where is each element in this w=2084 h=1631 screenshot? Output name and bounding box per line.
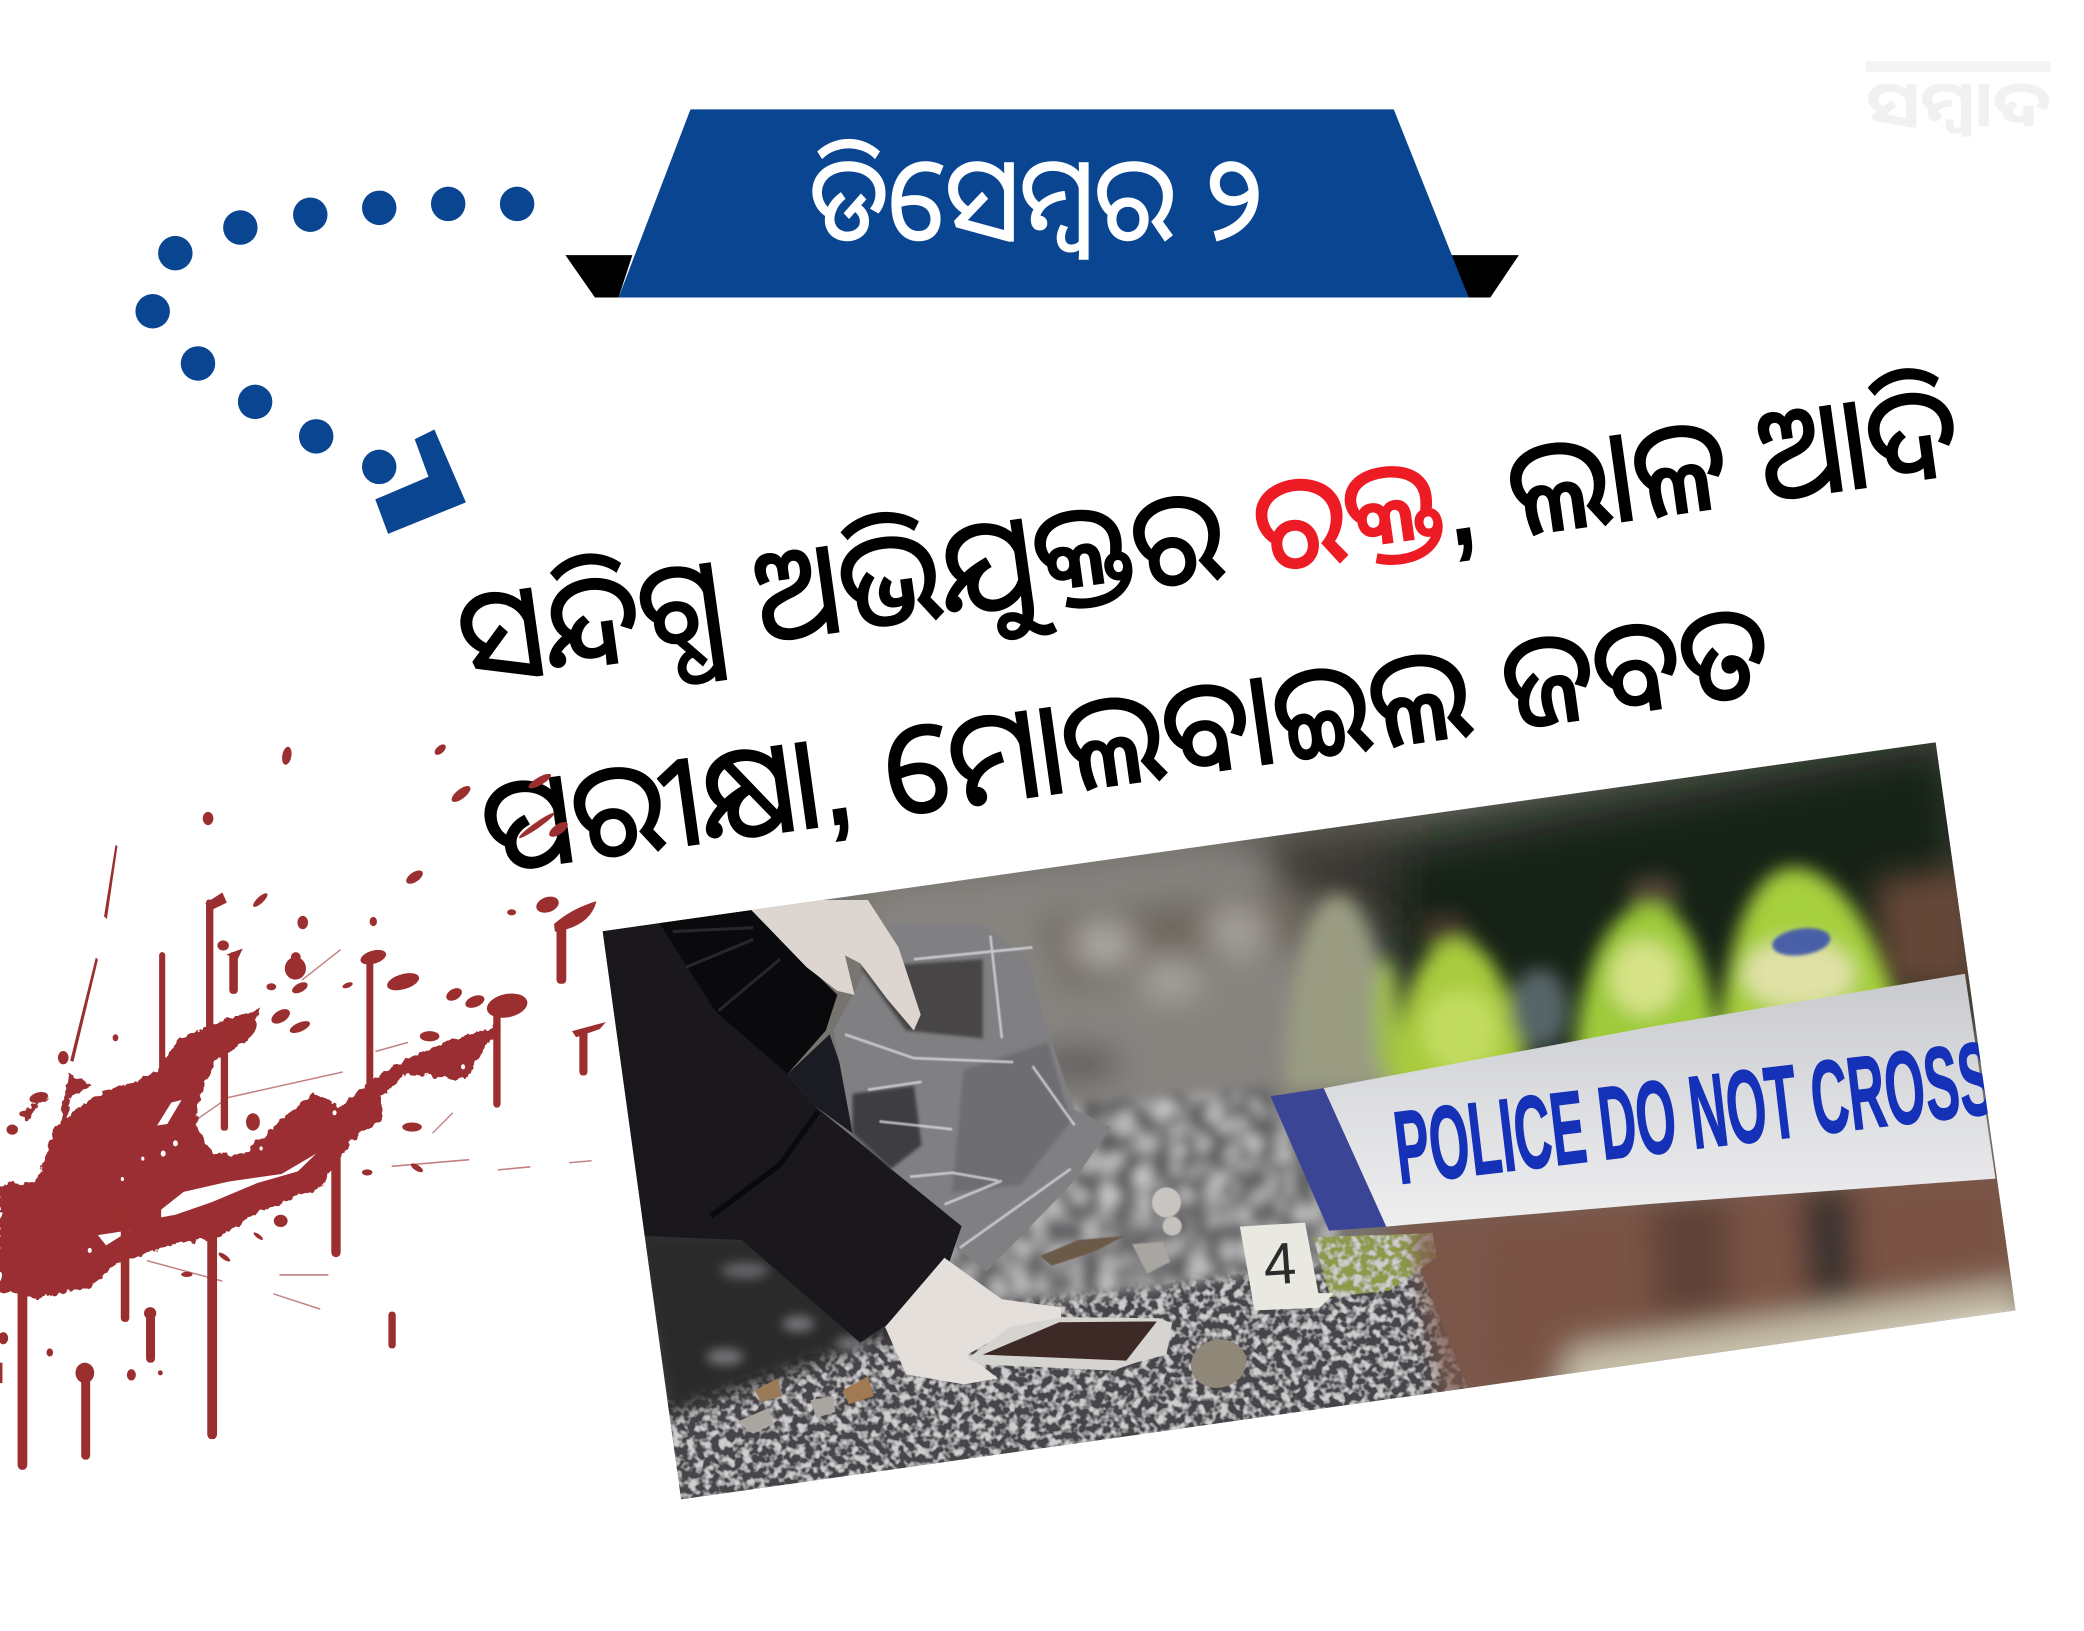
crime scene photo	[585, 718, 2035, 1517]
blurred hi-vis jackets	[1284, 867, 1905, 1091]
watermark: Sambad logo: ସମ୍ବାଦ	[1866, 68, 2051, 140]
gravel ground, blurred far section	[851, 1088, 1344, 1310]
date banner	[565, 109, 1519, 297]
splatter fine streaks	[147, 950, 592, 1309]
blurred background ground	[865, 851, 1330, 1117]
splatter white gaps	[88, 1046, 465, 1253]
gravel far-left shaded	[625, 1224, 905, 1417]
pebbles	[737, 1187, 1182, 1434]
jacket	[602, 908, 962, 1343]
phone	[967, 1317, 1172, 1370]
headline	[450, 358, 1968, 900]
foreground figure	[602, 900, 1182, 1434]
headline line 1: ସନ୍ଦିଗ୍ଧ ଅଭିଯୁକ୍ତର ରକ୍ତ, ଲାଳ ଆଦି	[450, 358, 1968, 715]
blood splatter	[0, 742, 606, 1470]
police tape	[1270, 974, 1999, 1231]
lower glove	[885, 1258, 1061, 1384]
soft white fade along bottom right	[1859, 1304, 2016, 1332]
evidence marker	[1240, 1223, 1334, 1310]
splatter main mass	[0, 1008, 500, 1297]
plastic bag	[833, 924, 1111, 1272]
date banner: ଡିସେମ୍ବର ୨	[810, 134, 1265, 264]
dotted arrow	[135, 187, 534, 534]
dissolving ground edge	[1410, 1221, 1497, 1410]
blurred brick wall	[1384, 865, 2035, 1410]
splatter drips	[18, 845, 606, 1470]
gravel ground, sharp near section	[667, 1260, 1468, 1500]
rock	[1190, 1339, 1246, 1388]
blurred stones lower left	[706, 1262, 867, 1365]
upper glove	[749, 900, 921, 1030]
hi-vis reflective patch	[1770, 925, 1832, 959]
blood flecks over headline	[517, 771, 570, 840]
photo background	[585, 732, 2035, 1517]
green gravel patch	[1313, 1233, 1437, 1297]
blurred dark trees	[1231, 742, 1980, 1064]
splatter droplets	[0, 742, 560, 1383]
headline line 2: ପରୀକ୍ଷା, ମୋଲବାଇଲ ଜବତ	[473, 577, 1778, 900]
dark shirt	[657, 908, 853, 1216]
evidence marker: 4	[1261, 1231, 1298, 1298]
